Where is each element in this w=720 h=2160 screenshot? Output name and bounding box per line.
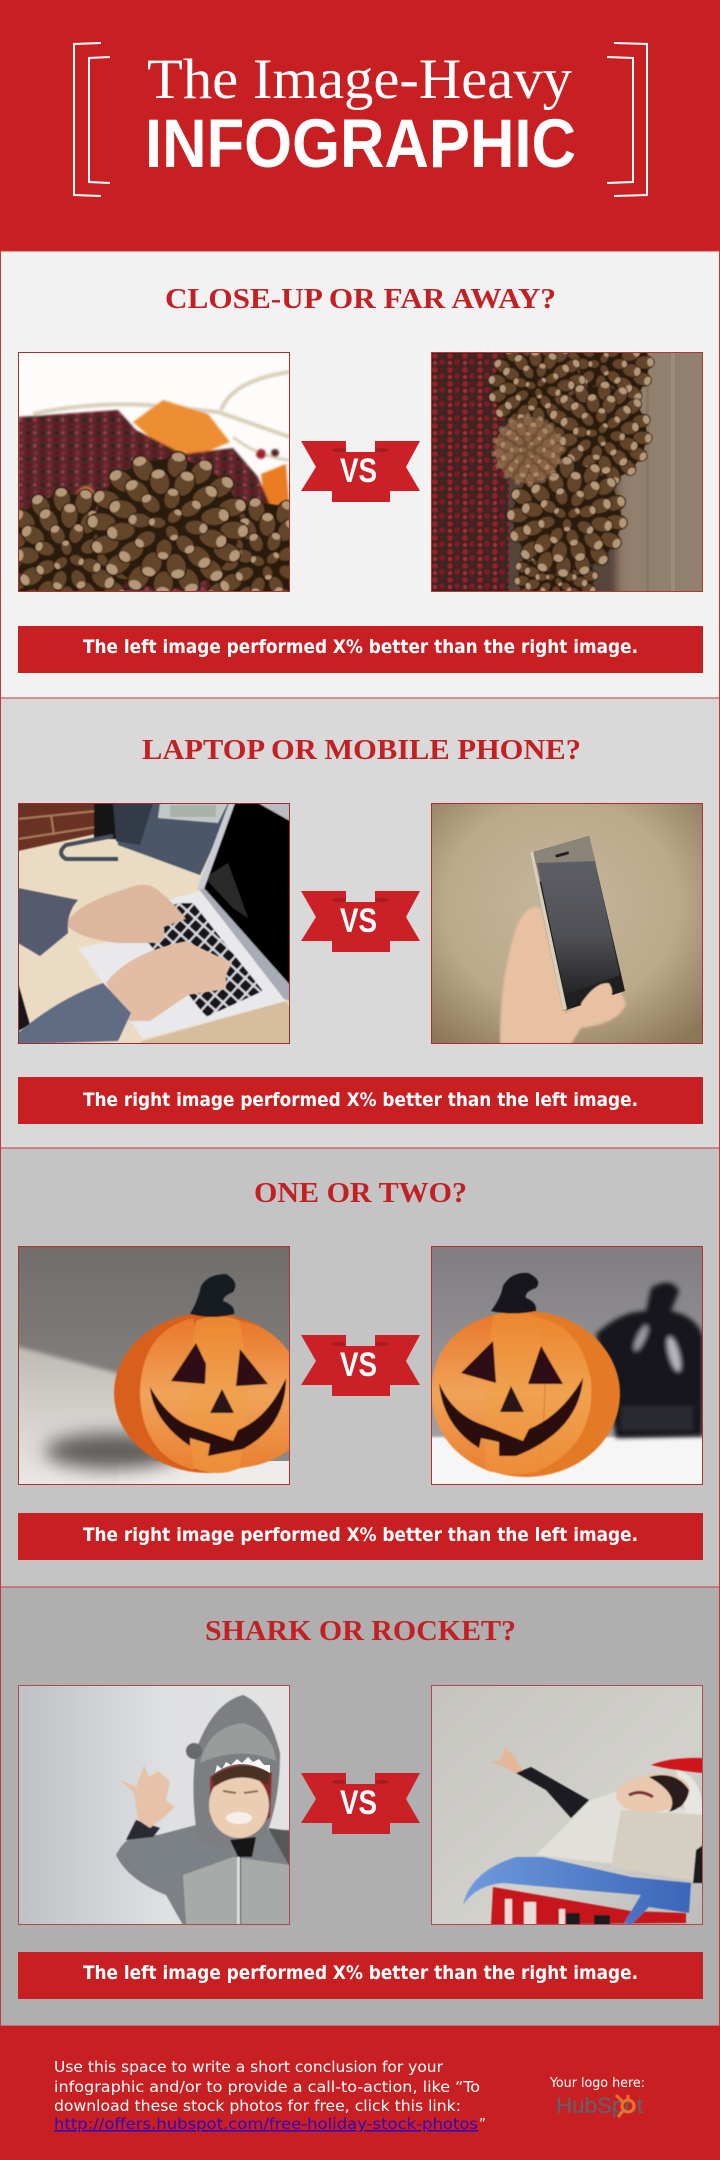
- heading: ONE OR TWO?: [254, 1177, 467, 1209]
- heading: SHARK OR ROCKET?: [205, 1615, 516, 1647]
- VS ribbon: VS: [340, 1784, 377, 1822]
- panel: shark or rocket: [0, 1587, 720, 2026]
- right bracket: [607, 43, 647, 196]
- VS ribbon: [301, 1773, 420, 1834]
- conclusion text: http://offers.hubspot.com/free-holiday-stock-photos: [54, 2115, 478, 2133]
- result bar: [18, 1077, 703, 1124]
- footer band: [0, 2026, 720, 2160]
- VS ribbon: [301, 441, 420, 502]
- panel: close-up or far away: [0, 251, 720, 698]
- photo: pinecones far away: [431, 352, 703, 592]
- heading: CLOSE-UP OR FAR AWAY?: [165, 283, 556, 315]
- VS ribbon: [301, 891, 420, 952]
- result bar: [18, 626, 703, 673]
- VS ribbon: VS: [340, 1346, 377, 1384]
- title: line one: The Image-Heavy: [147, 48, 573, 111]
- photo: pinecones close-up: [18, 352, 290, 592]
- logo placeholder: [549, 2076, 645, 2118]
- conclusion text: Use this space to write a short conclusion for your: [54, 2058, 444, 2076]
- conclusion text: download these stock photos for free, click this link:: [54, 2097, 461, 2115]
- left bracket: [74, 43, 110, 196]
- heading: LAPTOP OR MOBILE PHONE?: [142, 734, 581, 766]
- conclusion text: infographic and/or to provide a call-to-action, like “To: [54, 2078, 480, 2096]
- photo: hands on laptop: [18, 803, 290, 1044]
- VS ribbon: [301, 1335, 420, 1396]
- conclusion text: ”: [479, 2115, 486, 2133]
- VS ribbon: VS: [340, 902, 377, 940]
- result bar: The left image performed X% better than the right image.: [83, 636, 638, 658]
- logo placeholder: Your logo here:: [549, 2076, 645, 2091]
- VS ribbon: VS: [340, 452, 377, 490]
- icon: sprocket: [616, 2095, 634, 2117]
- title: line two: INFOGRAPHIC: [145, 105, 576, 182]
- panel: laptop or mobile phone: [0, 698, 720, 1148]
- result bar: [18, 1952, 703, 1999]
- photo: child in shark costume: [18, 1685, 290, 1925]
- photo: hand holding phone: [431, 803, 703, 1044]
- logo placeholder: HubSpot: [556, 2093, 643, 2118]
- photo: child in rocket costume: [431, 1685, 703, 1925]
- photo: one pumpkin: [18, 1246, 290, 1485]
- result bar: [18, 1513, 703, 1560]
- photo: two pumpkins: [431, 1246, 703, 1485]
- conclusion text: [54, 2058, 486, 2133]
- result bar: The right image performed X% better than the left image.: [83, 1089, 638, 1111]
- panel: one or two: [0, 1148, 720, 1587]
- header band: [0, 0, 720, 251]
- result bar: The left image performed X% better than the right image.: [83, 1962, 638, 1984]
- result bar: The right image performed X% better than the left image.: [83, 1524, 638, 1546]
